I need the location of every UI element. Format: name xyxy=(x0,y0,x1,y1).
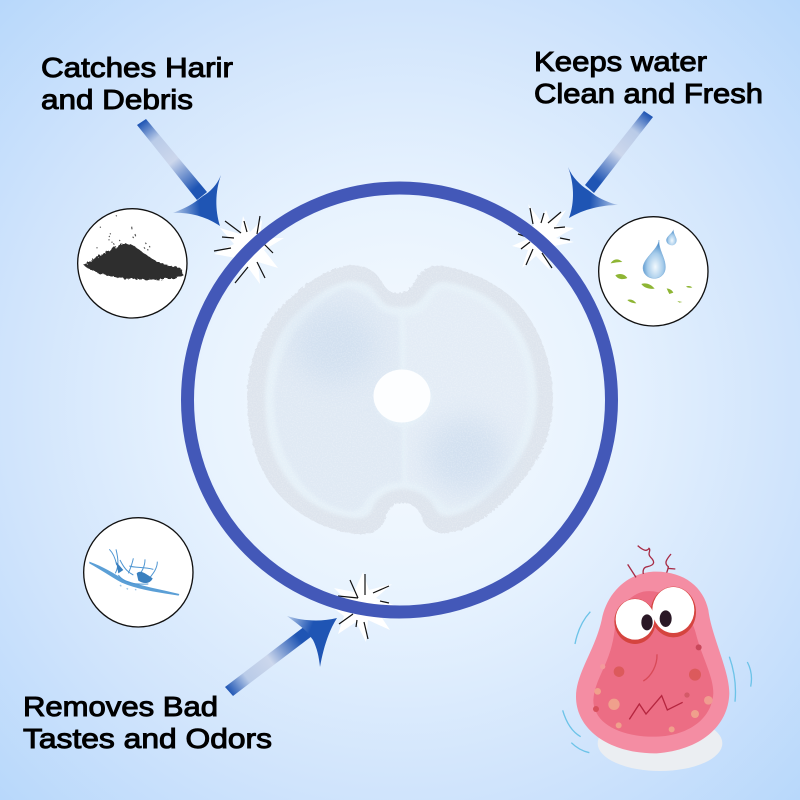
large water drop xyxy=(643,240,665,278)
icon: germ monster xyxy=(563,546,751,771)
heading: removes tastes and odors: Tastes and Odors xyxy=(23,723,272,754)
arrow: top right xyxy=(568,111,653,218)
monster eyes xyxy=(614,587,696,644)
splash band xyxy=(89,562,179,596)
filter pad xyxy=(240,258,560,540)
starburst: top left impact xyxy=(214,216,284,284)
pad: shaded patches xyxy=(250,268,552,533)
icon: water drop and leaves circle xyxy=(599,217,708,326)
heading: keeps water clean: Clean and Fresh xyxy=(534,78,763,109)
splash core xyxy=(116,562,153,583)
charcoal pile xyxy=(84,244,183,280)
monster spots xyxy=(593,644,713,732)
heading: removes tastes and odors: Removes Bad xyxy=(23,691,218,722)
starburst: top right impact xyxy=(512,204,574,270)
monster antennae xyxy=(628,546,675,577)
pad: outer rim xyxy=(247,265,553,534)
heading: removes tastes and odors xyxy=(23,691,272,754)
pad: inner band xyxy=(265,281,537,518)
icon: water splash circle xyxy=(84,518,193,627)
small water drop xyxy=(666,229,677,245)
heading: catches hair and debris: and Debris xyxy=(41,84,193,115)
starburst: bottom impact xyxy=(328,572,396,642)
heading: catches hair and debris: Catches Harir xyxy=(41,52,233,83)
pad: speckle texture xyxy=(250,268,552,533)
heading: catches hair and debris xyxy=(41,52,233,115)
leaves xyxy=(611,259,692,303)
icon: charcoal powder circle xyxy=(78,209,187,318)
pad: centre hole xyxy=(374,370,430,422)
pad: right section xyxy=(405,289,528,508)
central ring xyxy=(188,188,612,612)
monster shadow xyxy=(598,716,722,771)
arrow: bottom xyxy=(225,616,337,696)
heading: keeps water clean xyxy=(534,46,763,109)
pad: left section xyxy=(274,288,402,511)
monster nose and mouth xyxy=(643,654,657,681)
monster belly xyxy=(593,591,713,737)
monster body xyxy=(576,572,729,753)
arrow: top left xyxy=(137,119,221,226)
motion lines xyxy=(563,612,751,753)
splash crown xyxy=(109,549,157,584)
heading: keeps water clean: Keeps water xyxy=(534,46,707,77)
